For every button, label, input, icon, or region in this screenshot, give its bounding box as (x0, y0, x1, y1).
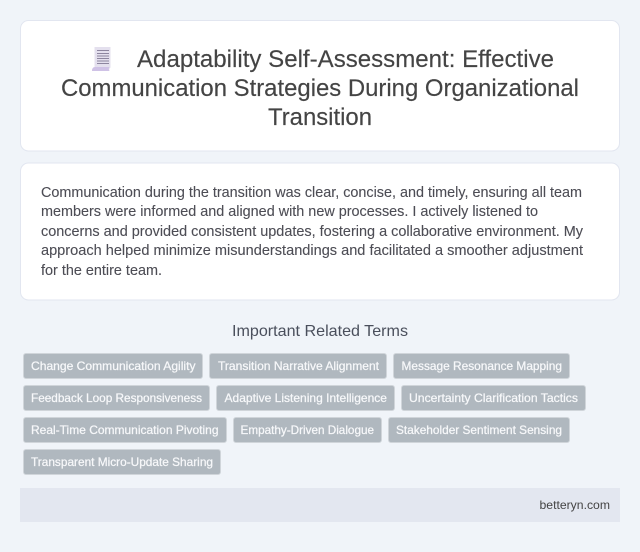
tag (24, 354, 202, 378)
title: Adaptability Self-Assessment: Effective (137, 46, 554, 73)
tag (24, 386, 210, 410)
tag list (24, 354, 586, 474)
tag (24, 450, 220, 474)
tag: Transition Narrative Alignment (218, 359, 380, 373)
tag (216, 386, 394, 410)
title (61, 46, 579, 131)
panel: description card (20, 163, 620, 300)
panel: title card (20, 20, 620, 151)
description text: Communication during the transition was clear, concise, and timely, ensuring all team (41, 185, 582, 201)
tag (210, 354, 386, 378)
tag: Uncertainty Clarification Tactics (409, 391, 578, 405)
heading: important related terms: Important Related Terms (232, 323, 408, 340)
tag: Adaptive Listening Intelligence (224, 391, 387, 405)
description text (41, 185, 584, 279)
tag (24, 418, 226, 442)
icon: receipt scroll (92, 47, 110, 71)
tag: Message Resonance Mapping (402, 359, 562, 373)
description text: concerns and provided consistent updates, fostering a collaborative environment. My (41, 224, 584, 240)
footer site name: betteryn.com (540, 498, 610, 512)
title: Communication Strategies During Organizational (61, 75, 579, 102)
tag: Stakeholder Sentiment Sensing (396, 423, 562, 437)
description text: for the entire team. (41, 263, 162, 279)
tag (402, 386, 586, 410)
title: Transition (268, 104, 372, 131)
tag (394, 354, 570, 378)
tag: Real-Time Communication Pivoting (31, 423, 218, 437)
tag (388, 418, 570, 442)
tag: Transparent Micro-Update Sharing (31, 455, 213, 469)
description text: members were informed and aligned with new processes. I actively listened to (41, 204, 538, 220)
tag: Change Communication Agility (31, 359, 196, 373)
footer bar (20, 488, 620, 522)
tag: Empathy-Driven Dialogue (240, 423, 374, 437)
description text: approach helped minimize misunderstandings and facilitated a smoother adjustment (41, 243, 583, 259)
tag: Feedback Loop Responsiveness (31, 391, 202, 405)
tag (234, 418, 382, 442)
